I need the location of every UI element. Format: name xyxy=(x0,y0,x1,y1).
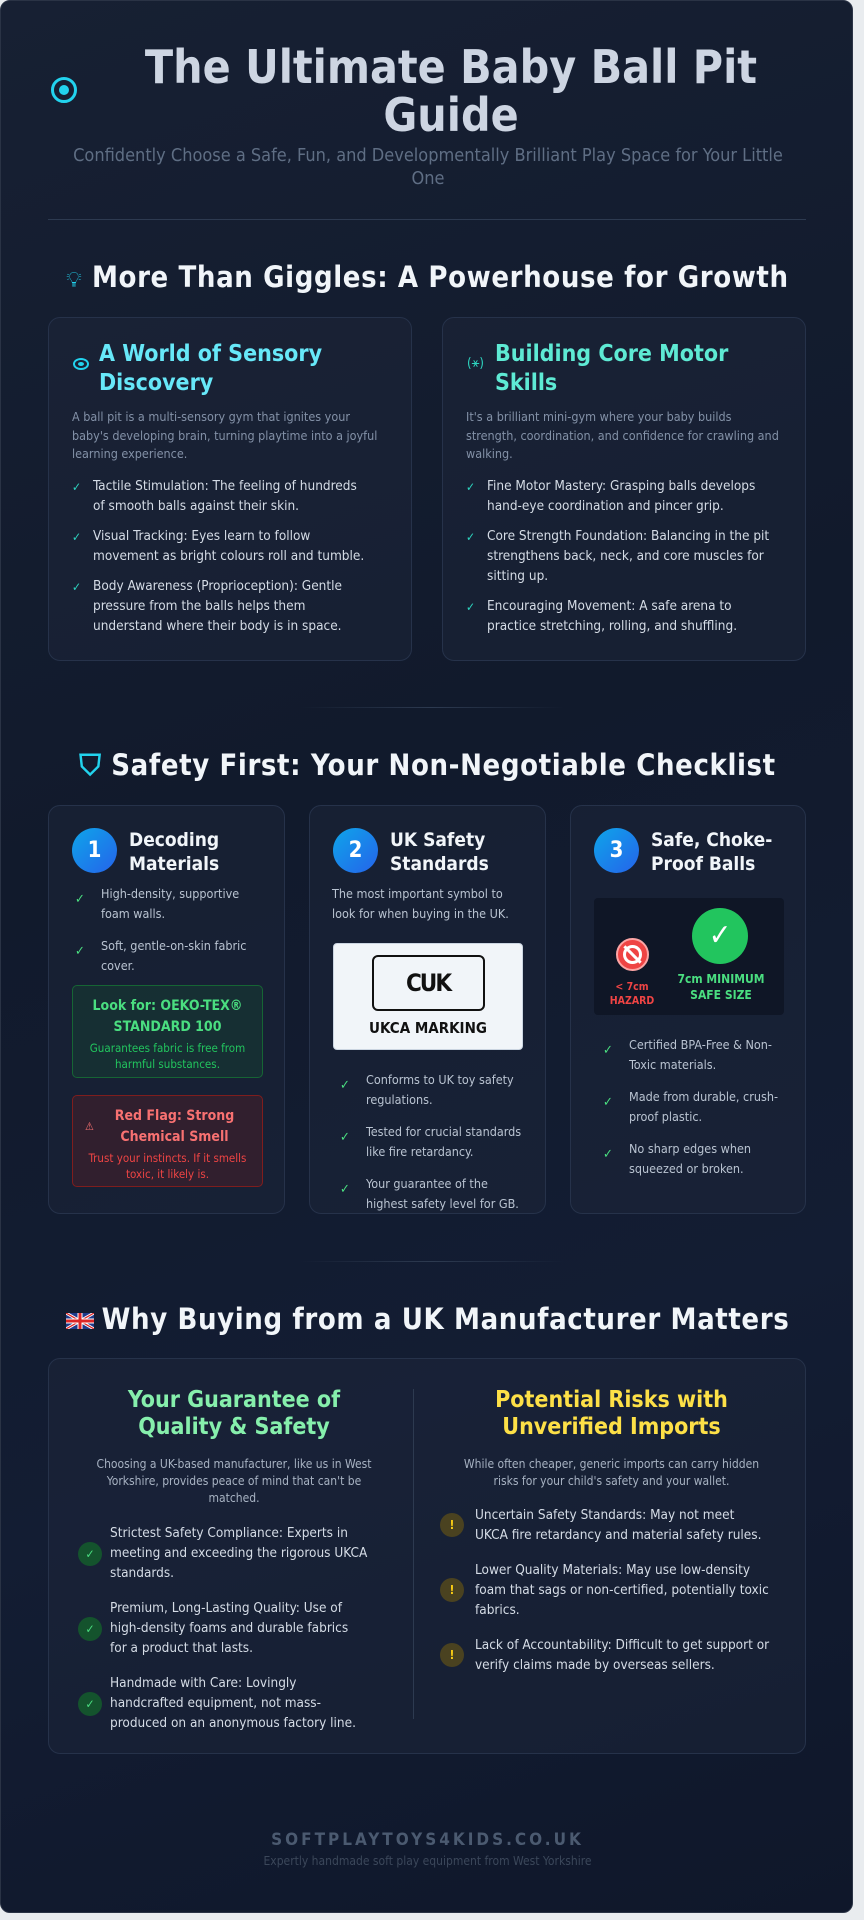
number 1 xyxy=(72,828,117,873)
checklist: No sharp edges when squeezed or broken. xyxy=(629,1141,751,1176)
column: guarantee: Your Guarantee of xyxy=(128,1387,340,1413)
callout: red flag: Red Flag: Strong Chemical Smell xyxy=(115,1108,234,1145)
callout: oeko-tex: Look for: OEKO-TEX® STANDARD 100 xyxy=(93,998,242,1035)
checklist: ✓ xyxy=(603,1043,613,1058)
icon: movement: (⚹) xyxy=(467,356,484,371)
icon: target xyxy=(51,77,77,103)
checklist: High-density, supportive foam walls. xyxy=(101,886,239,921)
column: guarantee: Quality & Safety xyxy=(138,1414,330,1440)
checklist: ✓ xyxy=(466,480,475,494)
ball size comparison: 7cm MINIMUM xyxy=(678,972,764,986)
checklist xyxy=(340,1072,521,1211)
checklist: Your guarantee of the highest safety level for GB. xyxy=(366,1176,519,1211)
checklist: ✓ xyxy=(603,1095,613,1110)
column: risks: Lower Quality Materials: May use low-density foam that sags or non-certified, potentially toxic fabrics. xyxy=(475,1562,769,1618)
column: risks xyxy=(440,1387,770,1673)
column: risks: Unverified Imports xyxy=(502,1414,721,1440)
number 3 xyxy=(594,828,639,873)
checklist xyxy=(466,478,769,634)
checklist: Core Strength Foundation: Balancing in the pit strengthens back, neck, and core muscles for sitting up. xyxy=(487,528,769,584)
checklist: Soft, gentle-on-skin fabric cover. xyxy=(101,938,246,973)
checklist: Fine Motor Mastery: Grasping balls develops hand-eye coordination and pincer grip. xyxy=(487,478,755,514)
checklist: ✓ xyxy=(340,1078,350,1093)
column: guarantee: Strictest Safety Compliance: Experts in meeting and exceeding the rigorous UKCA standards. xyxy=(110,1525,367,1581)
title: The Ultimate Baby Ball Pit Guide xyxy=(145,40,757,142)
checklist xyxy=(75,886,246,973)
checklist: Conforms to UK toy safety regulations. xyxy=(366,1072,514,1107)
checklist: Tactile Stimulation: The feeling of hundreds of smooth balls against their skin. xyxy=(93,478,357,514)
title: UK Safety Standards xyxy=(390,829,489,875)
callout: oeko-tex: Guarantees fabric is free from harmful substances. xyxy=(90,1041,245,1071)
icon: eye xyxy=(73,358,89,370)
panel: balls xyxy=(570,805,806,1214)
icon: hazard xyxy=(616,938,649,971)
ukca badge xyxy=(333,943,523,1050)
column: risks: ! xyxy=(450,1648,454,1662)
description: The most important symbol to look for when buying in the UK. xyxy=(332,886,509,921)
description: A ball pit is a multi-sensory gym that ignites your baby's developing brain, turning playtime into a joyful learning experience. xyxy=(72,409,377,461)
ukca badge: UKCA MARKING xyxy=(369,1019,487,1037)
checklist: Made from durable, crush-proof plastic. xyxy=(629,1089,778,1124)
panel: uk vs imports xyxy=(48,1358,806,1754)
number 2: 2 xyxy=(349,838,362,863)
column: guarantee: ✓ xyxy=(85,1697,95,1711)
checklist xyxy=(603,1037,778,1176)
heading: uk manufacturer: Why Buying from a UK Manufacturer Matters xyxy=(102,1302,789,1336)
column: guarantee: ✓ xyxy=(85,1622,95,1636)
checklist: Tested for crucial standards like fire retardancy. xyxy=(366,1124,521,1159)
title: Decoding Materials xyxy=(129,829,219,875)
column: guarantee: Premium, Long-Lasting Quality: Use of high-density foams and durable fabrics for a product that lasts. xyxy=(110,1600,348,1656)
heading: safety: ⛉ Safety First: Your Non-Negotiable Checklist xyxy=(79,748,776,782)
panel: sensory xyxy=(48,317,412,661)
icon: uk flag xyxy=(66,1313,94,1329)
checklist: Visual Tracking: Eyes learn to follow movement as bright colours roll and tumble. xyxy=(93,528,364,564)
number 3: 3 xyxy=(610,838,623,863)
title: Safe, Choke-Proof Balls xyxy=(651,829,772,875)
checklist: ✓ xyxy=(72,480,81,494)
checklist: ✓ xyxy=(340,1130,350,1145)
checklist: ✓ xyxy=(72,530,81,544)
footer: SOFTPLAYTOYS4KIDS.CO.UK xyxy=(271,1830,584,1850)
icon: safe: ✓ xyxy=(709,918,731,953)
checklist: ✓ xyxy=(340,1182,350,1197)
footer: Expertly handmade soft play equipment from West Yorkshire xyxy=(263,1854,592,1868)
ball size comparison: SAFE SIZE xyxy=(690,988,752,1002)
column: guarantee: Choosing a UK-based manufacturer, like us in West Yorkshire, provides peace of mind that can't be matched. xyxy=(97,1457,371,1505)
column: risks: Lack of Accountability: Difficult to get support or verify claims made by overseas sellers. xyxy=(475,1637,769,1673)
footer xyxy=(263,1830,592,1868)
callout: red flag: Trust your instincts. If it smells toxic, it likely is. xyxy=(89,1151,246,1181)
callout: red flag xyxy=(72,1095,263,1187)
column: guarantee: ✓ xyxy=(85,1547,95,1561)
ball size comparison: HAZARD xyxy=(610,995,654,1007)
number 1: 1 xyxy=(88,838,101,863)
checklist: ✓ xyxy=(75,892,85,907)
icon: safe xyxy=(692,908,748,964)
number 2 xyxy=(333,828,378,873)
checklist: Body Awareness (Proprioception): Gentle pressure from the balls helps them understand where their body is in space. xyxy=(93,578,342,634)
column: guarantee xyxy=(78,1387,372,1731)
checklist xyxy=(72,478,364,634)
panel: uk standards xyxy=(309,805,546,1214)
column: risks: While often cheaper, generic imports can carry hidden risks for your child's safety and your wallet. xyxy=(464,1457,759,1488)
column: risks: ! xyxy=(450,1518,454,1532)
checklist: Encouraging Movement: A safe arena to practice stretching, rolling, and shuffling. xyxy=(487,598,737,634)
card title: Building Core Motor Skills xyxy=(495,341,728,396)
ball size comparison: < 7cm xyxy=(615,981,649,993)
checklist: Certified BPA-Free & Non-Toxic materials. xyxy=(629,1037,772,1072)
checklist: ✓ xyxy=(466,530,475,544)
column: guarantee: Handmade with Care: Lovingly handcrafted equipment, not mass-produced on an anonymous factory line. xyxy=(110,1675,356,1731)
heading: growth: 💡︎ More Than Giggles: A Powerhouse for Growth xyxy=(66,260,789,294)
panel: materials xyxy=(48,805,285,1214)
column: risks: Uncertain Safety Standards: May not meet UKCA fire retardancy and material safety rules. xyxy=(475,1507,761,1543)
checklist: ✓ xyxy=(72,580,81,594)
ball size comparison xyxy=(594,898,784,1015)
callout: oeko-tex xyxy=(72,985,263,1078)
description: It's a brilliant mini-gym where your baby builds strength, coordination, and confidence for crawling and walking. xyxy=(466,409,779,461)
ukca badge: CUK xyxy=(406,969,450,997)
card title: A World of Sensory Discovery xyxy=(99,341,322,396)
panel: motor xyxy=(442,317,806,661)
checklist: ✓ xyxy=(466,600,475,614)
subtitle: Confidently Choose a Safe, Fun, and Developmentally Brilliant Play Space for Your Little One xyxy=(73,145,783,189)
checklist: ✓ xyxy=(603,1147,613,1162)
checklist: ✓ xyxy=(75,944,85,959)
column: risks: ! xyxy=(450,1583,454,1597)
callout: red flag: ⚠ xyxy=(85,1120,94,1133)
column: risks: Potential Risks with xyxy=(495,1387,728,1413)
